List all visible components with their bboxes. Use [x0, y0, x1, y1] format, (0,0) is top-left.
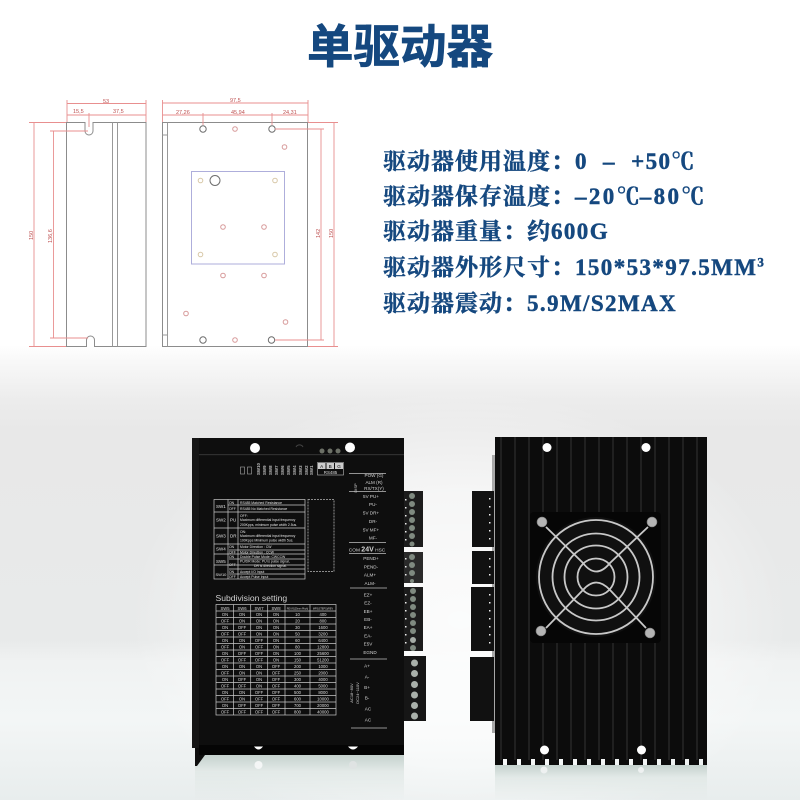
- subdivision table: ON: [222, 638, 228, 643]
- drawing: top view: 27,26: [176, 110, 190, 116]
- switch function table: OFF: [229, 563, 236, 567]
- switch function table: PU/DR Mode: PU is pulse signal,: [240, 560, 290, 564]
- drawing: side view: 150: [29, 231, 35, 240]
- switch function table: Double Pulse Mode: CWCCW: [240, 555, 286, 559]
- specifications list: 驱动器使用温度：0 – +50℃: [383, 142, 694, 176]
- switch function table: ON: [229, 555, 235, 559]
- subdivision table: 25600: [317, 651, 329, 656]
- switch function table: ON: [229, 570, 235, 574]
- switch function table: ON: [229, 501, 235, 505]
- drawing: side view: 136,6: [48, 229, 54, 243]
- subdivision table: OFF: [272, 670, 281, 676]
- subdivision table: 6400: [318, 638, 328, 643]
- subdivision table: OFF: [238, 710, 247, 714]
- subdivision table: ON: [222, 625, 228, 630]
- terminal labels: EA+: [364, 625, 373, 630]
- subdivision setting heading: Subdivision setting: [216, 593, 287, 603]
- subdivision table: ON: [239, 638, 245, 643]
- dashed window: [308, 500, 334, 572]
- subdivision table: SW6: [237, 606, 247, 611]
- switch function table: 200Kpps, minimum pulse width 2.5us.: [240, 523, 297, 527]
- subdivision table: OFF: [272, 684, 281, 688]
- subdivision table: 1000: [318, 664, 328, 669]
- subdivision table: OFF: [221, 658, 230, 662]
- terminal labels: RX/TX(Y): [364, 486, 384, 491]
- DIP switch labels: SW3: [298, 465, 303, 475]
- subdivision table: ON: [239, 618, 245, 624]
- switch function table: Motor Direction : CCW: [240, 550, 275, 554]
- subdivision table: SW5: [220, 606, 230, 611]
- subdivision table: OFF: [238, 625, 247, 630]
- subdivision table: ON: [256, 664, 262, 669]
- subdivision table: 2000: [318, 670, 328, 676]
- switch function table: ON: [229, 545, 235, 549]
- DIP switch labels: SW8: [268, 465, 273, 475]
- terminal labels: B+: [364, 685, 370, 690]
- switch function table: Accept I/O Input: [240, 570, 264, 574]
- terminal labels: MF-: [369, 536, 378, 540]
- subdivision table: ON: [256, 625, 262, 630]
- switch function table: OFF:: [240, 514, 248, 518]
- subdivision table: OFF: [221, 644, 230, 650]
- subdivision table: OFF: [238, 677, 247, 682]
- switch function table: SW2: [216, 518, 226, 522]
- subdivision table: OFF: [255, 696, 264, 702]
- subdivision table: ON: [222, 612, 228, 617]
- subdivision table: 1600: [318, 625, 328, 630]
- drawing: side view: [29, 99, 146, 346]
- subdivision table: ON: [256, 684, 262, 688]
- subdivision table: OFF: [272, 710, 281, 714]
- subdivision table: OFF: [255, 710, 264, 714]
- subdivision table: 5000: [318, 684, 328, 688]
- subdivision table: 10: [295, 612, 300, 617]
- subdivision table: 50: [295, 632, 300, 636]
- driver front: terminal blocks: [403, 491, 426, 721]
- switch function table: SW10: [216, 572, 227, 577]
- subdivision table: OFF: [272, 703, 281, 708]
- RS485 label: A: [320, 464, 324, 469]
- drawing: top view: 97,5: [230, 98, 241, 104]
- subdivision table: OFF: [238, 703, 247, 708]
- terminal labels: EGND: [363, 650, 377, 655]
- subdivision table: ON: [256, 612, 262, 617]
- subdivision table: 700: [294, 703, 302, 708]
- terminal labels: A+: [364, 664, 370, 668]
- specifications list: 驱动器外形尺寸：150*53*97.5MM3: [383, 254, 764, 280]
- switch function table: RS485 No Matched Resistance: [240, 507, 287, 511]
- terminal labels: DC24~110V: [355, 682, 360, 704]
- subdivision table: ON: [256, 677, 262, 682]
- subdivision table: 4000: [318, 677, 328, 682]
- switch function table: Motor Direction : CW: [240, 545, 272, 549]
- background glow: [0, 380, 800, 800]
- subdivision table: MPS(STEPS)/REV: [313, 608, 333, 610]
- subdivision table: ON: [273, 612, 279, 617]
- subdivision table: ON: [273, 644, 279, 650]
- DIP switch labels: SW7: [274, 465, 279, 475]
- subdivision table: OFF: [238, 658, 247, 662]
- switch function table: SW1: [216, 504, 226, 509]
- drawing: top view: 142: [316, 229, 322, 238]
- subdivision table: OFF: [238, 684, 247, 688]
- terminal labels: EB+: [364, 609, 373, 614]
- subdivision table: 300: [294, 677, 302, 682]
- terminal labels: ALM (R): [365, 480, 383, 485]
- subdivision table: OFF: [255, 658, 264, 662]
- subdivision table: REV/S(25mm Pitch): [287, 608, 308, 610]
- terminal labels: EZ+: [364, 592, 373, 598]
- switch function table: ON:: [240, 530, 246, 534]
- specifications list: 驱动器重量：约600G: [383, 219, 609, 244]
- subdivision table: 200: [294, 664, 302, 669]
- subdivision table: ON: [239, 664, 245, 669]
- subdivision table: ON: [239, 612, 245, 617]
- subdivision table: ON: [273, 618, 279, 624]
- terminal labels: A-: [365, 674, 370, 680]
- subdivision table: OFF: [238, 632, 247, 636]
- subdivision table: 500: [294, 690, 302, 695]
- subdivision table: ON: [239, 696, 245, 702]
- RS485 label: [318, 462, 344, 475]
- subdivision table: 40000: [317, 710, 329, 714]
- switch function table: Accept Pulse Input: [240, 575, 268, 579]
- DIP switch labels: SW2: [304, 465, 309, 475]
- title: 单驱动器: [307, 21, 493, 73]
- terminal labels: DISP: [353, 483, 358, 493]
- drawing: top view: [162, 98, 338, 346]
- subdivision table: 400: [320, 612, 327, 617]
- DIP switch labels: [240, 462, 314, 475]
- subdivision table: OFF: [255, 638, 264, 643]
- switch function table: SW3: [216, 534, 226, 538]
- terminal labels: E5V: [364, 642, 373, 646]
- DIP switch labels: SW5: [286, 465, 291, 475]
- terminal labels: PEND+: [363, 556, 379, 561]
- switch function table: PU: [230, 518, 236, 522]
- subdivision table: OFF: [255, 651, 264, 656]
- subdivision table: SW8: [271, 606, 281, 611]
- subdivision table: 20000: [317, 703, 329, 708]
- terminal labels: AC: [365, 706, 372, 712]
- subdivision table: OFF: [221, 632, 230, 636]
- subdivision table: 30: [295, 625, 300, 630]
- switch function table: DR is direction signal.: [254, 564, 287, 568]
- DIP switch labels: SW10: [256, 462, 261, 475]
- specifications list: [383, 142, 764, 316]
- subdivision table: 800: [320, 618, 327, 624]
- drawing: top view: 24,31: [283, 110, 297, 116]
- RS485 label: B: [329, 464, 332, 469]
- subdivision table: ON: [222, 664, 228, 669]
- drawing: top view: 45,94: [231, 110, 245, 116]
- subdivision table: 100: [294, 651, 302, 656]
- subdivision table: 8000: [318, 690, 328, 695]
- terminal labels: 5V PU+: [363, 494, 379, 499]
- terminal labels: POW (G): [365, 473, 384, 478]
- subdivision table: ON: [273, 632, 279, 636]
- floor reflection: [195, 755, 707, 800]
- driver back: heat sink: [495, 437, 707, 765]
- terminal labels: 5V DR+: [363, 510, 379, 516]
- subdivision table: ON: [239, 670, 245, 676]
- subdivision table: OFF: [221, 710, 230, 714]
- subdivision table: ON: [239, 690, 245, 695]
- switch function table: SW4: [216, 546, 226, 552]
- subdivision table: 3200: [318, 632, 328, 636]
- switch function table: DR: [230, 534, 237, 538]
- subdivision table: 150: [294, 658, 302, 662]
- subdivision table: [216, 604, 336, 715]
- terminal labels: COM 24V HSC: [349, 546, 386, 554]
- subdivision table: OFF: [255, 690, 264, 695]
- subdivision table: OFF: [221, 670, 230, 676]
- subdivision table: ON: [256, 618, 262, 624]
- terminal labels: EB-: [364, 617, 372, 622]
- icon: cooling fan with grille: [530, 512, 661, 643]
- subdivision table: OFF: [221, 696, 230, 702]
- subdivision table: ON: [256, 632, 262, 636]
- switch function table: OFF: [229, 575, 236, 579]
- subdivision table: OFF: [221, 684, 230, 688]
- terminal labels: AC18~80V: [349, 683, 354, 703]
- subdivision table: ON: [222, 651, 228, 656]
- subdivision table: 20: [295, 618, 300, 624]
- subdivision table: 400: [294, 684, 302, 688]
- terminal labels: 5V MF+: [363, 528, 379, 532]
- subdivision table: ON: [239, 644, 245, 650]
- subdivision table: OFF: [272, 677, 281, 682]
- driver front: body: [192, 438, 404, 766]
- switch function table: OFF: [229, 507, 236, 511]
- subdivision table: 10000: [317, 696, 329, 702]
- switch function table: RS485 Matched Resistance: [240, 501, 282, 505]
- switch function table: Maximum differential input frequency: [240, 534, 296, 538]
- subdivision table: 250: [294, 670, 302, 676]
- subdivision table: ON: [273, 638, 279, 643]
- subdivision table: 51200: [317, 658, 329, 662]
- subdivision table: OFF: [255, 644, 264, 650]
- RS485 label: RS485: [324, 470, 338, 475]
- subdivision table: ON: [222, 690, 228, 695]
- terminal labels: ALM+: [364, 572, 376, 578]
- terminal labels: AC: [365, 718, 372, 722]
- switch function table: 100Kpps Minimum pulse width 5us.: [240, 538, 293, 542]
- DIP switch labels: SW4: [292, 465, 297, 475]
- DIP switch labels: SW1: [309, 465, 314, 475]
- subdivision table: ON: [222, 677, 228, 682]
- terminal labels: EZ-: [364, 600, 372, 606]
- drawing: side view: 15,5: [73, 109, 84, 115]
- subdivision table: 12800: [317, 644, 329, 650]
- subdivision table: OFF: [238, 651, 247, 656]
- subdivision table: ON: [256, 670, 262, 676]
- terminal labels: B-: [365, 696, 370, 700]
- subdivision table: 60: [295, 638, 300, 643]
- subdivision table: 800: [294, 710, 302, 714]
- RS485 label: G: [337, 464, 341, 469]
- DIP switch labels: SW9: [262, 465, 267, 475]
- subdivision table: OFF: [272, 690, 281, 695]
- terminal labels: PU-: [369, 502, 377, 507]
- subdivision table: SW7: [254, 606, 264, 611]
- subdivision table: ON: [273, 651, 279, 656]
- switch function table: OFF: [229, 550, 236, 554]
- terminal labels: [349, 473, 387, 728]
- subdivision table: ON: [273, 625, 279, 630]
- subdivision table: OFF: [255, 703, 264, 708]
- switch function table: [214, 500, 305, 579]
- specifications list: 驱动器保存温度：–20℃–80℃: [383, 178, 704, 211]
- drawing: side view: 53: [103, 99, 109, 105]
- drawing: side view: 37,5: [113, 109, 124, 115]
- terminal labels: EA-: [364, 634, 372, 638]
- terminal labels: ALM-: [365, 581, 376, 586]
- subdivision table: ON: [222, 703, 228, 708]
- DIP switch labels: SW6: [280, 465, 285, 475]
- terminal labels: PEND-: [364, 564, 379, 570]
- switch function table: Maximum differential input frequency: [240, 518, 296, 522]
- terminal labels: DR-: [369, 519, 378, 524]
- drawing: top view: 150: [329, 229, 335, 238]
- specifications list: 驱动器震动：5.9M/S2MAX: [383, 290, 677, 316]
- subdivision table: ON: [273, 658, 279, 662]
- switch function table: SW5: [216, 559, 226, 564]
- subdivision table: 600: [294, 696, 302, 702]
- subdivision table: OFF: [272, 664, 281, 669]
- subdivision table: OFF: [272, 696, 281, 702]
- subdivision table: 80: [295, 644, 300, 650]
- driver back: terminal side: [470, 455, 496, 733]
- subdivision table: OFF: [221, 618, 230, 624]
